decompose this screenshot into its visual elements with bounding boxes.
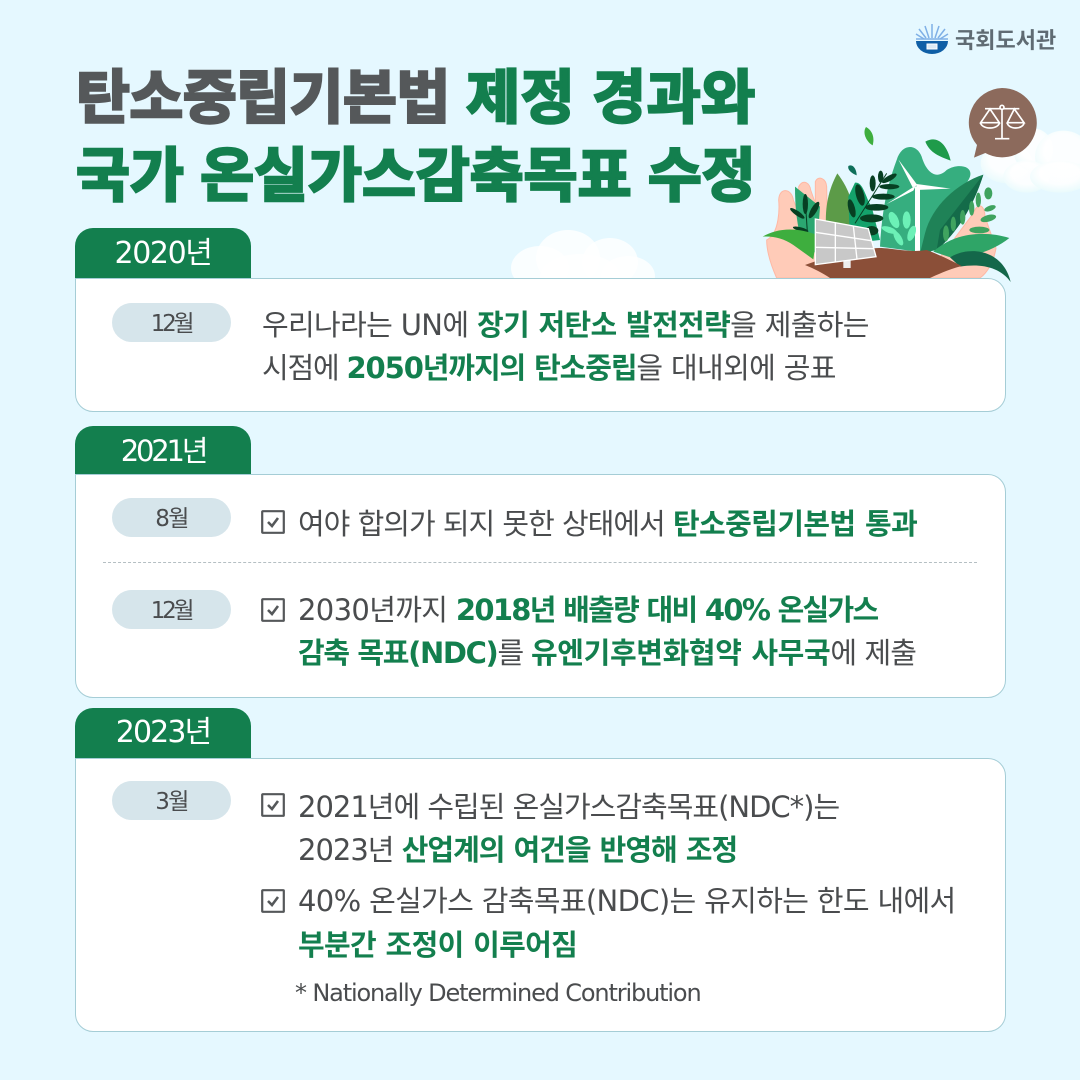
footnote: * Nationally Determined Contribution <box>295 979 701 1007</box>
tab: 2020년: 2020년 <box>115 236 211 271</box>
pill: 8월 <box>112 498 231 537</box>
hands <box>767 178 996 278</box>
logo: 국회도서관 <box>916 23 1056 55</box>
big dark leaf right <box>920 175 983 253</box>
pill: 12월: 12월 <box>151 311 191 337</box>
illustration: hands, plants, wind turbine, solar panel <box>762 88 1080 282</box>
icon: checkbox <box>261 598 285 622</box>
right sprig <box>943 187 997 241</box>
dark leaves left <box>795 187 820 253</box>
text: 2023 item 2 line 2: 부분간 조정이 이루어짐 <box>298 928 577 962</box>
pill: 3월: 3월 <box>155 789 188 815</box>
icon: checkbox <box>261 793 285 817</box>
text: 2020 line 2: 시점에 2050년까지의 탄소중립을 대내외에 공표 <box>262 351 836 385</box>
text: 2023 item 1 line 2: 2023년 산업계의 여건을 반영해 조정 <box>298 833 737 867</box>
logo text: 국회도서관 <box>955 23 1056 55</box>
tab: 2021년 <box>75 426 251 474</box>
wind turbine <box>887 159 951 252</box>
icon: checkbox <box>261 889 285 913</box>
tab: 2023년: 2023년 <box>116 715 210 750</box>
icon: library emblem <box>916 24 948 54</box>
title line 2: 국가 온실가스감축목표 수정 <box>76 128 756 213</box>
panel: 2021 <box>75 474 1006 698</box>
solar panel <box>815 219 876 268</box>
text: 2023 item 1 line 1: 2021년에 수립된 온실가스감축목표(NDC*)는 <box>298 790 839 824</box>
text: 2021 December line 2: 감축 목표(NDC)를 유엔기후변화협약 사무국에 제출 <box>298 636 916 670</box>
icon: checkbox <box>261 510 285 534</box>
panel: 2020 <box>75 278 1006 412</box>
cloud behind speech bubble <box>981 128 1080 193</box>
speech bubble with scales <box>969 88 1037 158</box>
title <box>76 50 756 213</box>
tab: 2023년 <box>75 708 251 758</box>
pill: 3월 <box>112 781 231 820</box>
tab: 2020년 <box>75 228 251 278</box>
pill: 12월 <box>112 303 231 342</box>
soil <box>805 248 962 278</box>
pill: 12월: 12월 <box>151 598 191 624</box>
text: 2021 August: 여야 합의가 되지 못한 상태에서 탄소중립기본법 통과 <box>298 507 917 541</box>
pill: 12월 <box>112 590 231 629</box>
title line 1: 탄소중립기본법 제정 경과와 <box>76 50 756 135</box>
small mint plant <box>881 210 918 247</box>
pill: 8월: 8월 <box>155 506 188 532</box>
background clouds <box>511 230 655 278</box>
tab: 2021년: 2021년 <box>121 434 205 468</box>
falling leaves <box>864 127 873 145</box>
large green backdrop leaf <box>880 147 970 253</box>
text: 2020 line 1: 우리나라는 UN에 장기 저탄소 발전전략을 제출하는 <box>262 308 869 342</box>
panel: 2023 <box>75 758 1006 1032</box>
text: 2023 item 2 line 1: 40% 온실가스 감축목표(NDC)는 유지하는 한도 내에서 <box>298 884 956 918</box>
text: 2021 December line 1: 2030년까지 2018년 배출량 대비 40% 온실가스 <box>298 593 878 627</box>
